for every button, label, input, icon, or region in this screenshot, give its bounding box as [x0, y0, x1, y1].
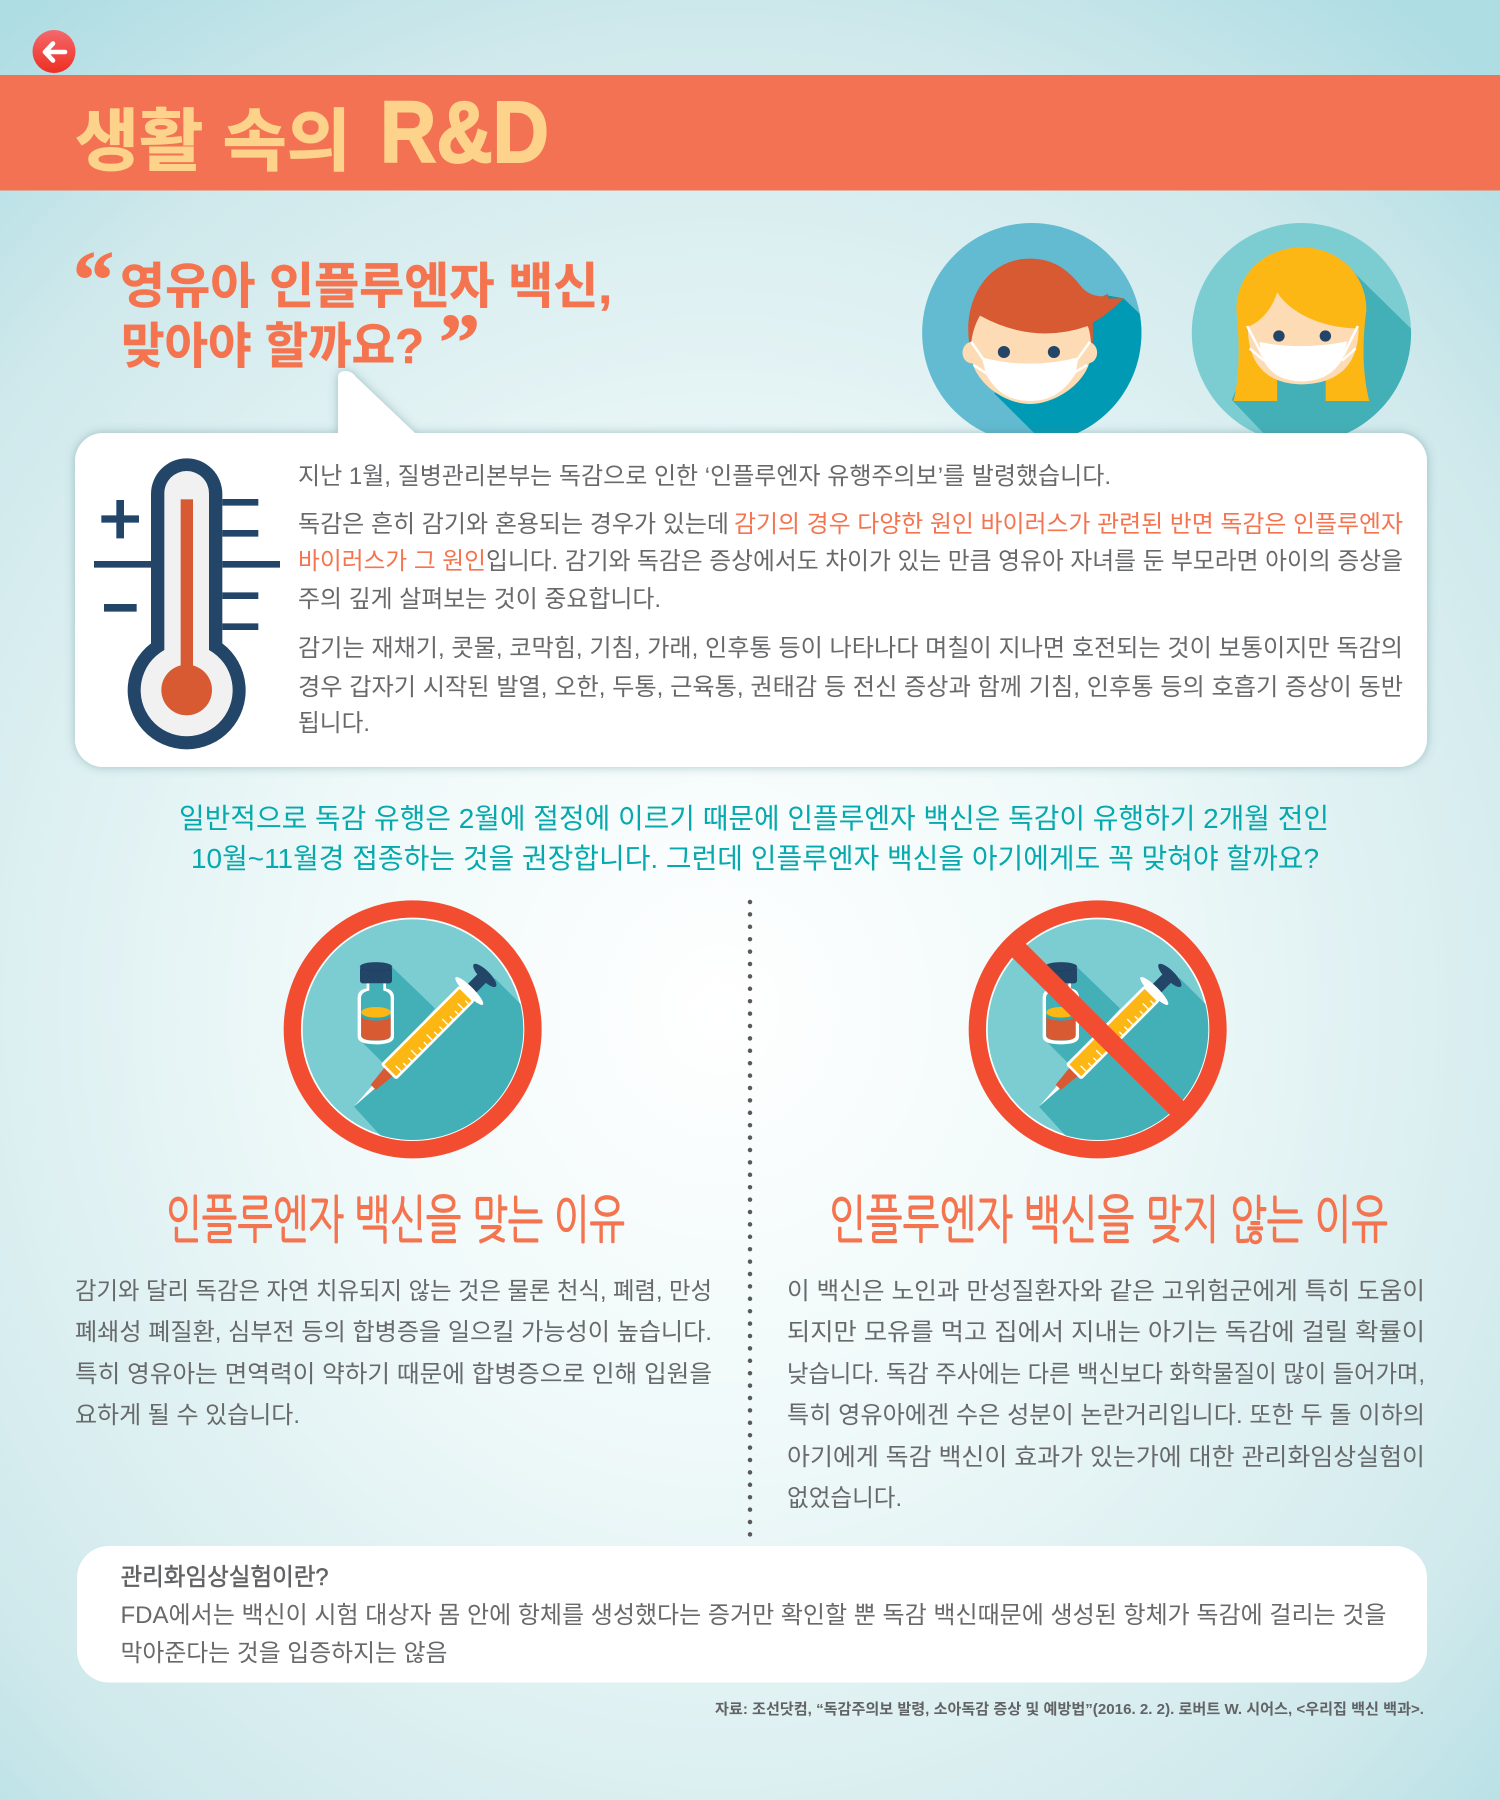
heading: question: 맞아야 할까요?	[121, 320, 424, 374]
icon: back arrow button	[32, 30, 76, 73]
text block: flu explanation: 입니다. 감기와 독감은 증상에서도 차이가 있는 만큼 영유아 자녀를 둔 부모라면 아이의 증상을	[486, 548, 1403, 575]
callout: vaccination timing	[179, 803, 1329, 874]
text block: flu explanation: 독감은 흔히 감기와 혼용되는 경우가 있는데	[298, 511, 729, 538]
callout: vaccination timing: 10월~11월경 접종하는 것을 권장합니다. 그런데 인플루엔자 백신을 아기에게도 꼭 맞혀야 할까요?	[191, 843, 1319, 874]
text block: reasons against: 특히 영유아에겐 수은 성분이 논란거리입니다. 또한 두 돌 이하의	[787, 1402, 1425, 1429]
text block: reasons for	[75, 1278, 712, 1429]
text block: flu explanation: 경우 갑자기 시작된 발열, 오한, 두통, 근육통, 권태감 등 전신 증상과 함께 기침, 인후통 등의 호흡기 증상이 동반	[298, 674, 1403, 701]
panel: definition of controlled clinical trial: 막아준다는 것을 입증하지는 않음	[120, 1640, 448, 1667]
icon: no vaccine	[969, 900, 1227, 1158]
text block: reasons against	[787, 1278, 1425, 1512]
icon: boy with mask	[922, 223, 1142, 433]
text block: reasons for: 폐쇄성 폐질환, 심부전 등의 합병증을 일으킬 가능성이 높습니다.	[75, 1319, 712, 1346]
text block: flu explanation: 주의 깊게 살펴보는 것이 중요합니다.	[298, 586, 661, 613]
heading: reasons for vaccination: 인플루엔자 백신을 맞는 이유	[166, 1194, 625, 1246]
panel: flu explanation speech bubble	[75, 371, 1427, 767]
source note: 자료: 조선닷컴, “독감주의보 발령, 소아독감 증상 및 예방법”(2016. 2. 2). 로버트 W. 시어스, <우리집 백신 백과>.	[715, 1701, 1424, 1718]
text block: flu explanation: 됩니다.	[298, 710, 370, 737]
heading: question: ”	[439, 297, 480, 388]
text block: reasons against: 없었습니다.	[787, 1485, 902, 1512]
callout: vaccination timing: 일반적으로 독감 유행은 2월에 절정에 이르기 때문에 인플루엔자 백신은 독감이 유행하기 2개월 전인	[179, 803, 1329, 834]
icon: vaccine	[284, 900, 542, 1158]
panel: definition of controlled clinical trial: 관리화임상실험이란?	[120, 1564, 328, 1591]
text block: reasons against: 되지만 모유를 먹고 집에서 지내는 아기는 독감에 걸릴 확률이	[787, 1319, 1425, 1346]
text block: reasons for: 요하게 될 수 있습니다.	[75, 1402, 300, 1429]
text block: flu explanation: 감기는 재채기, 콧물, 코막힘, 기침, 가래, 인후통 등이 나타나다 며칠이 지나면 호전되는 것이 보통이지만 독감의	[298, 635, 1403, 662]
title banner: R&D	[380, 84, 549, 181]
heading: question: 영유아 인플루엔자 백신,	[120, 260, 612, 314]
panel: definition of controlled clinical trial: FDA에서는 백신이 시험 대상자 몸 안에 항체를 생성했다는 증거만 확인할 뿐 독감 백신때문에 생성된 항체가 독감에 걸리는 것을	[120, 1602, 1386, 1629]
text block: flu explanation	[298, 463, 1403, 737]
text block: reasons against: 이 백신은 노인과 만성질환자와 같은 고위험군에게 특히 도움이	[787, 1278, 1425, 1305]
panel: definition of controlled clinical trial	[77, 1546, 1427, 1682]
title banner	[0, 75, 1500, 190]
text block: reasons against: 아기에게 독감 백신이 효과가 있는가에 대한 관리화임상실험이	[787, 1444, 1425, 1471]
text block: flu explanation: 바이러스가 그 원인	[298, 548, 486, 575]
title banner: 생활 속의	[75, 104, 351, 180]
text block: flu explanation: 지난 1월, 질병관리본부는 독감으로 인한 ‘인플루엔자 유행주의보’를 발령했습니다.	[298, 463, 1111, 490]
heading: question: “	[73, 234, 114, 325]
text block: flu explanation: 감기의 경우 다양한 원인 바이러스가 관련된 반면 독감은 인플루엔자	[734, 511, 1403, 538]
icon: thermometer	[94, 458, 280, 749]
text block: reasons for: 특히 영유아는 면역력이 약하기 때문에 합병증으로 인해 입원을	[75, 1361, 712, 1388]
text block: reasons for: 감기와 달리 독감은 자연 치유되지 않는 것은 물론 천식, 폐렴, 만성	[75, 1278, 712, 1305]
heading: question	[73, 234, 612, 388]
icon: girl with mask	[1192, 223, 1416, 447]
text block: reasons against: 낮습니다. 독감 주사에는 다른 백신보다 화학물질이 많이 들어가며,	[787, 1361, 1425, 1388]
